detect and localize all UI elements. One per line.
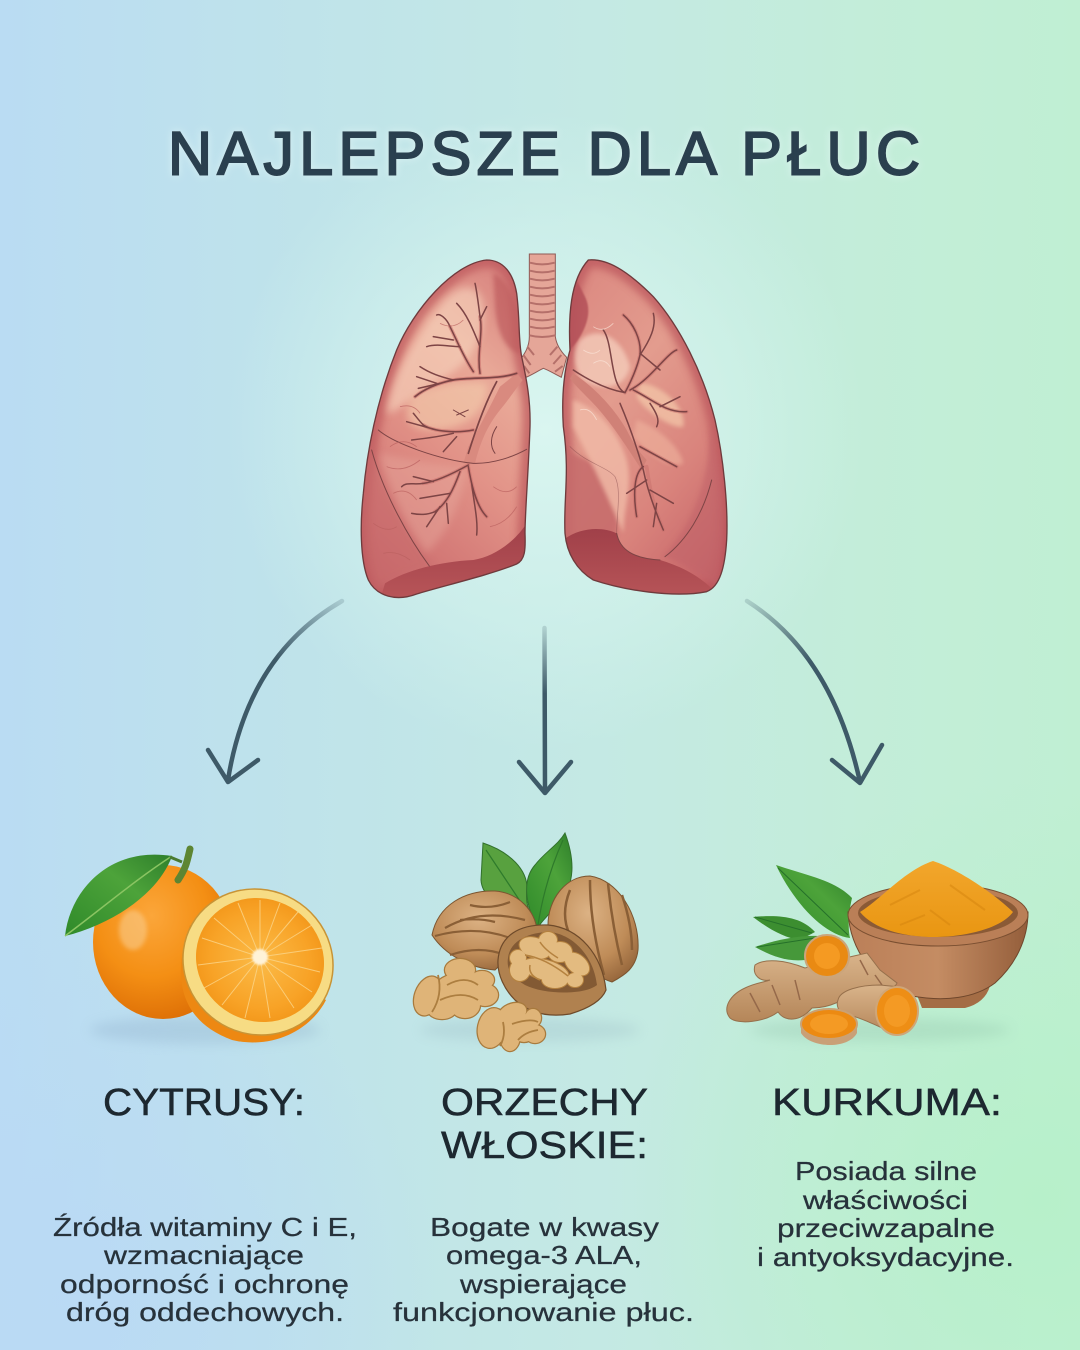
- column: turmeric description: właściwości: [802, 1185, 968, 1215]
- kernel in shell: [510, 932, 594, 988]
- wooden bowl: [848, 861, 1028, 1008]
- icon: turmeric: [727, 861, 1028, 1045]
- column: turmeric description: [757, 1156, 1014, 1272]
- column: turmeric heading: KURKUMA:: [772, 1082, 1002, 1124]
- orange half: [156, 862, 360, 1062]
- icon: walnuts: [409, 833, 640, 1051]
- column: walnuts description: Bogate w kwasy: [430, 1212, 659, 1242]
- leaf and stem: [65, 849, 190, 936]
- right lung (viewer side): [553, 260, 727, 603]
- column: citrus description: [53, 1212, 357, 1327]
- left walnut: [432, 891, 537, 970]
- left lung (viewer side): [359, 260, 530, 603]
- cut turmeric piece: [837, 985, 918, 1035]
- turmeric slice: [801, 1009, 857, 1045]
- icon: oranges: [65, 849, 360, 1062]
- column: citrus heading: CYTRUSY:: [103, 1082, 305, 1124]
- column: turmeric description: i antyoksydacyjne.: [757, 1242, 1014, 1272]
- arrow: to walnuts: [519, 628, 571, 793]
- arrow: to citrus: [208, 601, 342, 782]
- green leaves: [481, 833, 572, 928]
- open walnut half: [498, 925, 606, 1015]
- column: walnuts description: funkcjonowanie płuc.: [393, 1297, 694, 1327]
- whole orange: [93, 865, 233, 1019]
- title: NAJLEPSZE DLA PŁUC: [168, 120, 920, 188]
- arrow: to turmeric: [747, 601, 882, 783]
- column: walnuts heading: WŁOSKIE:: [441, 1125, 648, 1167]
- turmeric leaves: [753, 865, 852, 960]
- back walnut: [548, 876, 638, 982]
- kernel left: [409, 959, 498, 1019]
- column: walnuts heading: [441, 1082, 648, 1167]
- column: turmeric description: przeciwzapalne: [777, 1213, 995, 1243]
- column: walnuts description: omega-3 ALA,: [446, 1240, 642, 1270]
- column: citrus description: Źródła witaminy C i E,: [53, 1212, 357, 1242]
- column: walnuts heading: ORZECHY: [441, 1082, 648, 1124]
- column: citrus description: wzmacniające: [103, 1240, 304, 1270]
- column: citrus description: odporność i ochronę: [60, 1269, 349, 1299]
- column: walnuts description: wspierające: [459, 1269, 627, 1299]
- lungs illustration: [359, 254, 727, 603]
- column: citrus description: dróg oddechowych.: [66, 1297, 344, 1327]
- trachea: [520, 254, 567, 377]
- column: turmeric description: Posiada silne: [795, 1156, 977, 1186]
- rhizome: [727, 935, 897, 1022]
- kernel bottom: [474, 999, 545, 1051]
- column: walnuts description: [393, 1212, 694, 1327]
